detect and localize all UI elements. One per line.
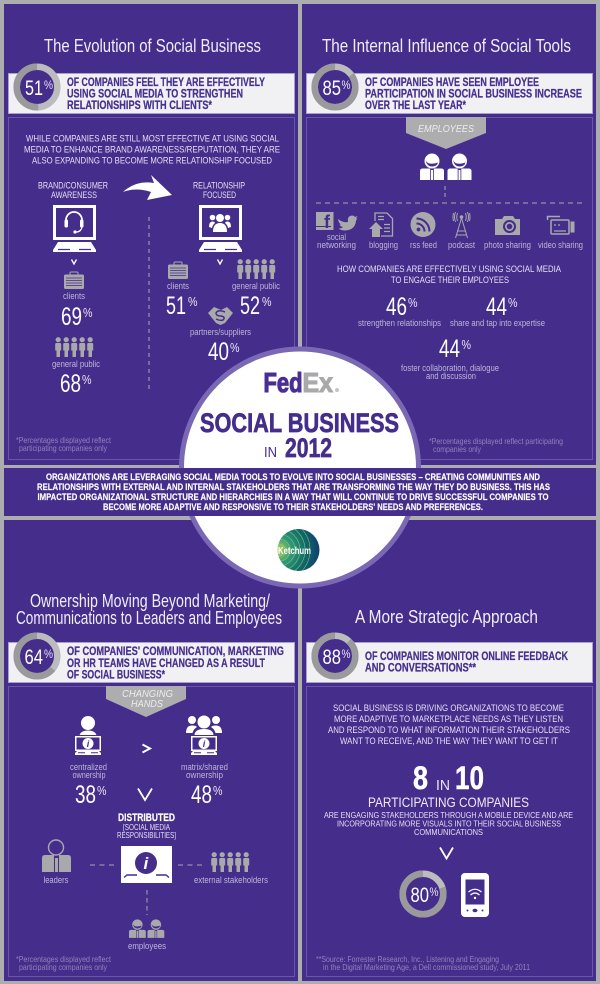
label: external stakeholders: external stakeholders (194, 875, 268, 885)
label: social networking: networking (317, 240, 356, 250)
label: distributed (117, 812, 176, 840)
stat bar: 88% (306, 636, 592, 682)
intro text: ALSO EXPANDING TO BECOME MORE RELATIONSHIP FOCUSED (32, 156, 272, 166)
panel: The Evolution of Social Business (4, 4, 298, 465)
heading: ownership (16, 590, 282, 628)
stat: general public 52%: 52 (240, 292, 260, 320)
arrow: curved white (123, 175, 172, 200)
footnote (429, 436, 563, 454)
stat: general public 52%: general public (232, 281, 280, 291)
stat bar: 88%: 88 (322, 646, 341, 669)
stat: clients 51%: clients (167, 281, 189, 291)
label: brand/consumer awareness (38, 180, 108, 201)
footnote: source: **Source: Forrester Research, Inc., Listening and Engaging (316, 954, 499, 964)
intro text (24, 134, 280, 166)
footnote: *Percentages displayed reflect (16, 435, 112, 445)
logo: Ketchum: Ketchum (278, 546, 311, 557)
footnote: source: in the Digital Marketing Age, a Dell commissioned study, July 2011 (323, 962, 530, 972)
icon: matrix group (186, 716, 222, 755)
icon: smartphone (461, 873, 489, 917)
footnote: *Percentages displayed reflect participating (429, 436, 563, 446)
stat bar: 51%: % (44, 78, 53, 92)
intro text: MEDIA TO ENHANCE BRAND AWARENESS/REPUTATION, THEY ARE (24, 144, 280, 156)
label: distributed: RESPONSIBILITIES] (117, 830, 176, 840)
text: mobile device: INCORPORATING MORE VISUALS INTO THEIR SOCIAL BUSINESS (337, 818, 561, 828)
stat: 44% share and tap: % (508, 295, 518, 310)
stat: clients 69%: % (83, 305, 93, 320)
stat: 8 in 10: IN (436, 777, 450, 794)
logo: FedEx (264, 367, 339, 398)
label: podcast: podcast (448, 240, 475, 250)
stat: partners/suppliers 40%: 40 (208, 338, 229, 366)
ring: 80%: % (430, 885, 439, 899)
stat bar: 51%: OF COMPANIES FEEL THEY ARE EFFECTIVELY (67, 75, 265, 89)
footnote (16, 435, 112, 453)
logo: FedEx: Fed (264, 367, 302, 398)
icon: distributed monitor (121, 846, 172, 883)
ring: 80%: 80 (410, 884, 429, 907)
panel: Ownership Moving Beyond Marketing (4, 520, 298, 981)
stat: 8 in 10: 8 (413, 760, 428, 796)
icon: podcast (453, 212, 470, 238)
heading: evolution: The Evolution of Social Business (44, 35, 261, 56)
stat: partners/suppliers 40%: % (230, 340, 240, 355)
stat: 44% share and tap: share and tap into expertise (450, 318, 545, 328)
title: Social Business: SOCIAL BUSINESS (200, 408, 399, 438)
stat: general public 52%: % (262, 294, 272, 309)
label: distributed: [SOCIAL MEDIA (123, 822, 170, 832)
stat: 44% foster collaboration (401, 335, 499, 381)
stat: matrix 48%: 48 (191, 781, 212, 809)
panel: The Internal Influence of Social Tools (302, 4, 596, 465)
stat bar: 64%: 64 (24, 646, 43, 669)
stat: 44% foster collaboration: % (462, 337, 471, 352)
stat: 44% share and tap (450, 293, 545, 328)
icon: distributed monitor: i (144, 854, 150, 873)
logo: Ketchum (278, 529, 320, 571)
stat: general public 68%: general public (52, 359, 100, 369)
subheading: participating companies: PARTICIPATING COMPANIES (368, 794, 529, 810)
icon: blogging (369, 213, 392, 237)
icon: facebook: f (324, 212, 331, 232)
label: blogging: blogging (369, 240, 398, 250)
footnote: companies only (433, 444, 482, 454)
stat bar: 51% (8, 67, 294, 114)
stat: matrix 48%: ownership (186, 770, 223, 780)
stat: 8 in 10: 10 (455, 760, 484, 796)
chevron (72, 260, 76, 264)
stat: clients 69% (61, 272, 93, 331)
stat bar: 88%: AND CONVERSATIONS** (365, 660, 476, 674)
icon: twitter (338, 216, 358, 230)
icon: employees small (129, 919, 164, 938)
stat: general public 68% (52, 337, 100, 398)
banner: changing hands: CHANGING (122, 688, 173, 700)
title: in 2012 (264, 433, 332, 463)
stat bar: 64%: OR HR TEAMS HAVE CHANGED AS A RESULT (67, 656, 265, 670)
center circle: title badge (182, 349, 418, 586)
icon: video sharing (548, 216, 574, 234)
stat: 46% strengthen relationships: % (408, 295, 418, 310)
stat: 46% strengthen relationships (358, 293, 441, 328)
footnote: participating companies only (19, 962, 108, 972)
intro text: WANT TO RECEIVE, AND THE WAY THEY WANT TO GET IT (340, 736, 558, 747)
label: social networking (317, 232, 356, 250)
stat: general public 68%: % (82, 372, 92, 387)
label: brand/consumer awareness: BRAND/CONSUMER (38, 180, 108, 192)
stat: 44% foster collaboration: and discussion (426, 371, 476, 381)
label: social networking: social (327, 232, 346, 242)
label: relationship focused: FOCUSED (203, 190, 236, 201)
subheading: engage employees: TO ENGAGE THEIR EMPLOYEES (391, 275, 509, 286)
stat: centralized 38%: 38 (75, 781, 96, 809)
icon: employees (420, 154, 472, 180)
stat: 46% strengthen relationships: 46 (386, 293, 407, 321)
label: brand/consumer awareness: AWARENESS (51, 190, 97, 201)
label: leaders: leaders (44, 875, 69, 885)
title: in 2012: 2012 (285, 433, 332, 463)
footnote (16, 954, 112, 972)
stat bar: 85%: % (342, 78, 351, 92)
stat: general public 68%: 68 (60, 370, 81, 398)
stat: 44% share and tap: 44 (486, 293, 507, 321)
logo: FedEx: Ex (302, 367, 334, 398)
banner: changing hands: HANDS (131, 698, 163, 710)
stat: 44% foster collaboration: 44 (439, 335, 460, 363)
label: employees: employees (128, 941, 166, 951)
stat: clients 69%: clients (63, 291, 85, 301)
stat: clients 69%: 69 (61, 303, 82, 331)
stat: clients 51%: % (188, 294, 198, 309)
stat: clients 51% (166, 262, 198, 320)
icon: photo sharing (495, 216, 520, 235)
label: relationship focused (193, 180, 245, 201)
stat: matrix 48%: matrix/shared (181, 762, 228, 772)
icon: facebook (316, 212, 334, 232)
stat bar: 64%: OF COMPANIES' COMMUNICATION, MARKETING (67, 644, 284, 658)
band: summary statement: BECOME MORE ADAPTIVE AND RESPONSIVE TO THEIR STAKEHOLDERS' NEEDS AND PREFERENCES. (103, 502, 483, 513)
stat bar: 85% (306, 67, 592, 114)
label: distributed: DISTRIBUTED (118, 812, 175, 824)
banner: employees: EMPLOYEES (418, 123, 474, 135)
footnote: source (316, 954, 530, 972)
stat bar: 85%: OF COMPANIES HAVE SEEN EMPLOYEE (365, 75, 539, 89)
intro text: WHILE COMPANIES ARE STILL MOST EFFECTIVE AT USING SOCIAL (26, 134, 279, 144)
label: photo sharing: photo sharing (484, 240, 531, 250)
banner: employees (406, 117, 486, 149)
stat bar: 51%: USING SOCIAL MEDIA TO STRENGTHEN (67, 86, 243, 100)
icon: monitor with group (199, 206, 242, 252)
stat bar: 64%: % (44, 647, 53, 661)
panel: A More Strategic Approach (302, 520, 596, 981)
heading: ownership: Communications to Leaders and Employees (16, 607, 282, 628)
stat: general public 52% (232, 259, 280, 320)
stat bar: 64% (8, 636, 294, 682)
heading: ownership: Ownership Moving Beyond Marketing/ (30, 590, 271, 611)
text: mobile device (324, 810, 573, 837)
stat bar: 51%: 51 (25, 77, 43, 100)
heading: strategic approach: A More Strategic Approach (355, 606, 538, 627)
stat bar: 88%: % (342, 647, 351, 661)
stat bar: 64%: OF SOCIAL BUSINESS* (67, 668, 165, 682)
stat: centralized 38%: centralized (70, 762, 107, 772)
intro text (328, 703, 570, 747)
label: relationship focused: RELATIONSHIP (193, 180, 245, 192)
icon: monitor with headset (53, 206, 96, 252)
chevron (138, 788, 152, 800)
chevron (218, 260, 222, 264)
stat: centralized 38%: ownership (72, 770, 106, 780)
icon: rss feed (410, 212, 436, 237)
stat: clients 51%: 51 (166, 292, 186, 320)
stat: 8 in 10 (413, 760, 484, 796)
label: rss feed: rss feed (410, 240, 437, 250)
stat: 46% strengthen relationships: strengthen relationships (358, 318, 441, 328)
stat: matrix 48%: % (213, 783, 223, 798)
stat: matrix 48% (181, 762, 228, 809)
stat: centralized 38%: % (97, 783, 107, 798)
stat: 44% foster collaboration: foster collaboration, dialogue (401, 363, 499, 373)
icon: leader (42, 840, 71, 872)
banner: changing hands (106, 686, 186, 717)
stat: partners/suppliers 40%: partners/suppliers (190, 327, 251, 337)
stat bar: 51%: RELATIONSHIPS WITH CLIENTS* (67, 98, 212, 112)
subheading: engage employees (337, 264, 562, 286)
stat bar: 85%: 85 (322, 77, 341, 100)
icon: external stakeholders (211, 852, 249, 872)
text: mobile device: COMMUNICATIONS (414, 827, 483, 837)
stat: partners/suppliers 40% (190, 307, 251, 366)
icon: centralized person (75, 716, 101, 755)
footnote: *Percentages displayed reflect (16, 954, 112, 964)
social tools row (316, 212, 583, 250)
chevron (440, 848, 453, 858)
ring: 80% (403, 874, 443, 914)
title: in 2012: IN (264, 444, 277, 461)
stat bar: 85%: OVER THE LAST YEAR* (365, 98, 466, 112)
stat: centralized 38% (70, 762, 107, 809)
band: summary statement (4, 468, 596, 516)
symbol: greater than (142, 744, 150, 752)
footnote: participating companies only (19, 443, 108, 453)
label: video sharing: video sharing (538, 240, 583, 250)
